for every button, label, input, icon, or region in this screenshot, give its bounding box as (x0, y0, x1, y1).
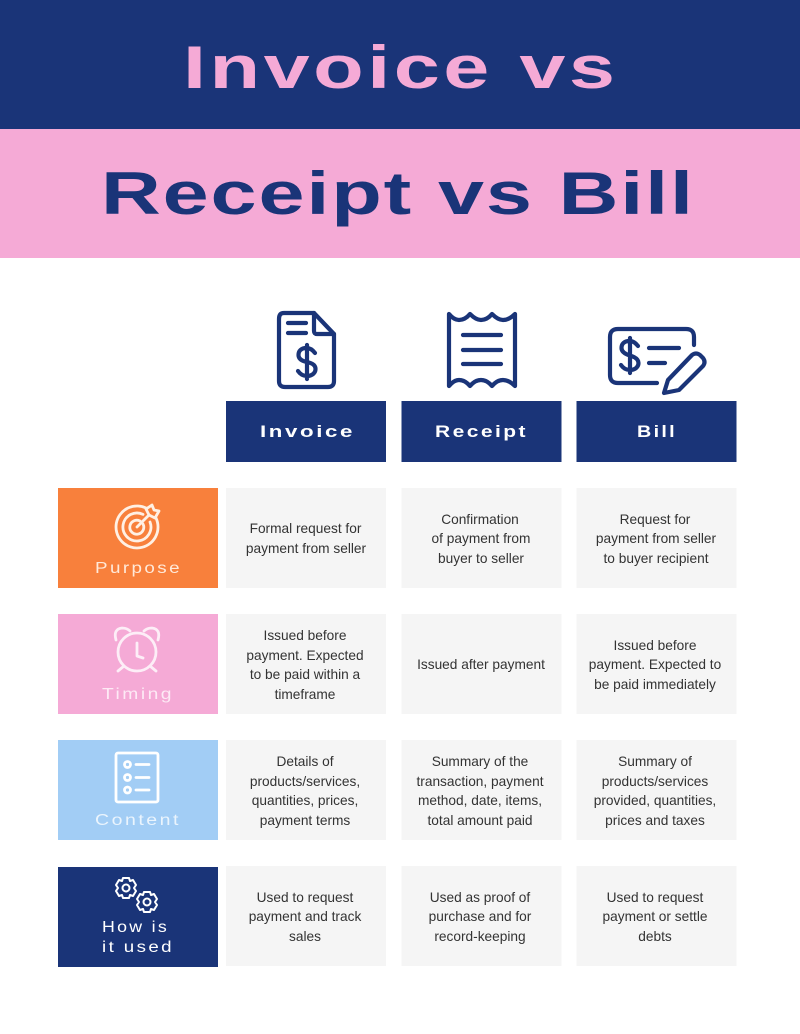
cell: Invoice content (226, 740, 386, 840)
icon: receipt (449, 314, 515, 386)
title band: Invoice vs (0, 0, 800, 129)
row label: How is it used: How is (102, 919, 169, 936)
row label: Content (58, 740, 218, 840)
cell: Bill content: products/services (602, 774, 708, 789)
cell: Receipt purpose (402, 488, 562, 588)
icon: checklist (116, 753, 158, 802)
icon: bill with pencil (610, 329, 704, 393)
icon: target (116, 505, 159, 548)
cell: Invoice purpose: Formal request for (250, 521, 362, 536)
cell: Receipt use: record-keeping (434, 929, 526, 944)
cell: Invoice timing: payment. Expected (246, 648, 364, 663)
row label: How is it used (58, 867, 218, 967)
row label: Purpose: Purpose (95, 560, 182, 577)
cell: Receipt content: Summary of the (432, 754, 528, 769)
cell: Bill content (576, 740, 736, 840)
cell: Receipt use (402, 866, 562, 966)
cell: Bill use: Used to request (607, 890, 704, 905)
cell: Receipt content: method, date, items, (418, 793, 542, 808)
cell: Receipt timing: Issued after payment (417, 657, 545, 672)
cell: Receipt purpose: buyer to seller (438, 551, 524, 566)
cell: Receipt content (402, 740, 562, 840)
cell: Bill purpose: payment from seller (596, 531, 717, 546)
cell: Invoice content: payment terms (260, 813, 350, 828)
header: Receipt: Receipt (435, 422, 528, 441)
cell: Invoice content: quantities, prices, (252, 793, 358, 808)
cell: Receipt use: Used as proof of (430, 890, 530, 905)
title band: Invoice vs: Invoice vs (183, 35, 615, 101)
cell: Bill purpose: Request for (620, 512, 691, 527)
cell: Invoice timing: Issued before (264, 628, 346, 643)
cell: Invoice content: Details of (276, 754, 334, 769)
row label: Content: Content (95, 812, 181, 829)
cell: Invoice use: Used to request (257, 890, 354, 905)
cell: Bill timing: payment. Expected to (589, 657, 722, 672)
cell: Invoice purpose: payment from seller (246, 541, 367, 556)
cell: Bill content: Summary of (618, 754, 692, 769)
cell: Receipt purpose: Confirmation (441, 512, 519, 527)
row label: Timing (58, 614, 218, 714)
cell: Bill purpose: to buyer recipient (604, 551, 709, 566)
cell: Receipt content: total amount paid (427, 813, 533, 828)
cell: Bill timing (576, 614, 736, 714)
cell: Receipt use: purchase and for (429, 909, 532, 924)
header: Invoice (226, 401, 386, 462)
cell: Bill use (576, 866, 736, 966)
header: Bill: Bill (637, 422, 677, 441)
cell: Bill content: prices and taxes (605, 813, 705, 828)
cell: Bill content: provided, quantities, (594, 793, 716, 808)
cell: Receipt purpose: of payment from (432, 531, 530, 546)
cell: Receipt timing (402, 614, 562, 714)
cell: Bill timing: Issued before (614, 638, 696, 653)
title band: Receipt vs Bill (0, 129, 800, 258)
icon: invoice document (279, 313, 334, 387)
header: Invoice: Invoice (260, 422, 355, 441)
cell: Invoice timing: to be paid within a (250, 667, 361, 682)
cell: Receipt content: transaction, payment (416, 774, 544, 789)
cell: Bill use: payment or settle (602, 909, 708, 924)
cell: Invoice use: payment and track (249, 909, 361, 924)
row label: Purpose (58, 488, 218, 588)
cell: Bill purpose (576, 488, 736, 588)
cell: Bill timing: be paid immediately (594, 677, 716, 692)
cell: Invoice use: sales (289, 929, 321, 944)
cell: Bill use: debts (638, 929, 672, 944)
row label: Timing: Timing (102, 686, 174, 703)
cell: Invoice purpose (226, 488, 386, 588)
title band: Receipt vs Bill: Receipt vs Bill (101, 161, 693, 227)
icon: alarm clock (115, 628, 159, 671)
cell: Invoice content: products/services, (250, 774, 360, 789)
row label: How is it used: it used (102, 939, 174, 956)
cell: Invoice use (226, 866, 386, 966)
cell: Invoice timing (226, 614, 386, 714)
cell: Invoice timing: timeframe (275, 687, 335, 702)
icon: gears (116, 878, 157, 912)
header: Bill (576, 401, 736, 462)
header: Receipt (402, 401, 562, 462)
